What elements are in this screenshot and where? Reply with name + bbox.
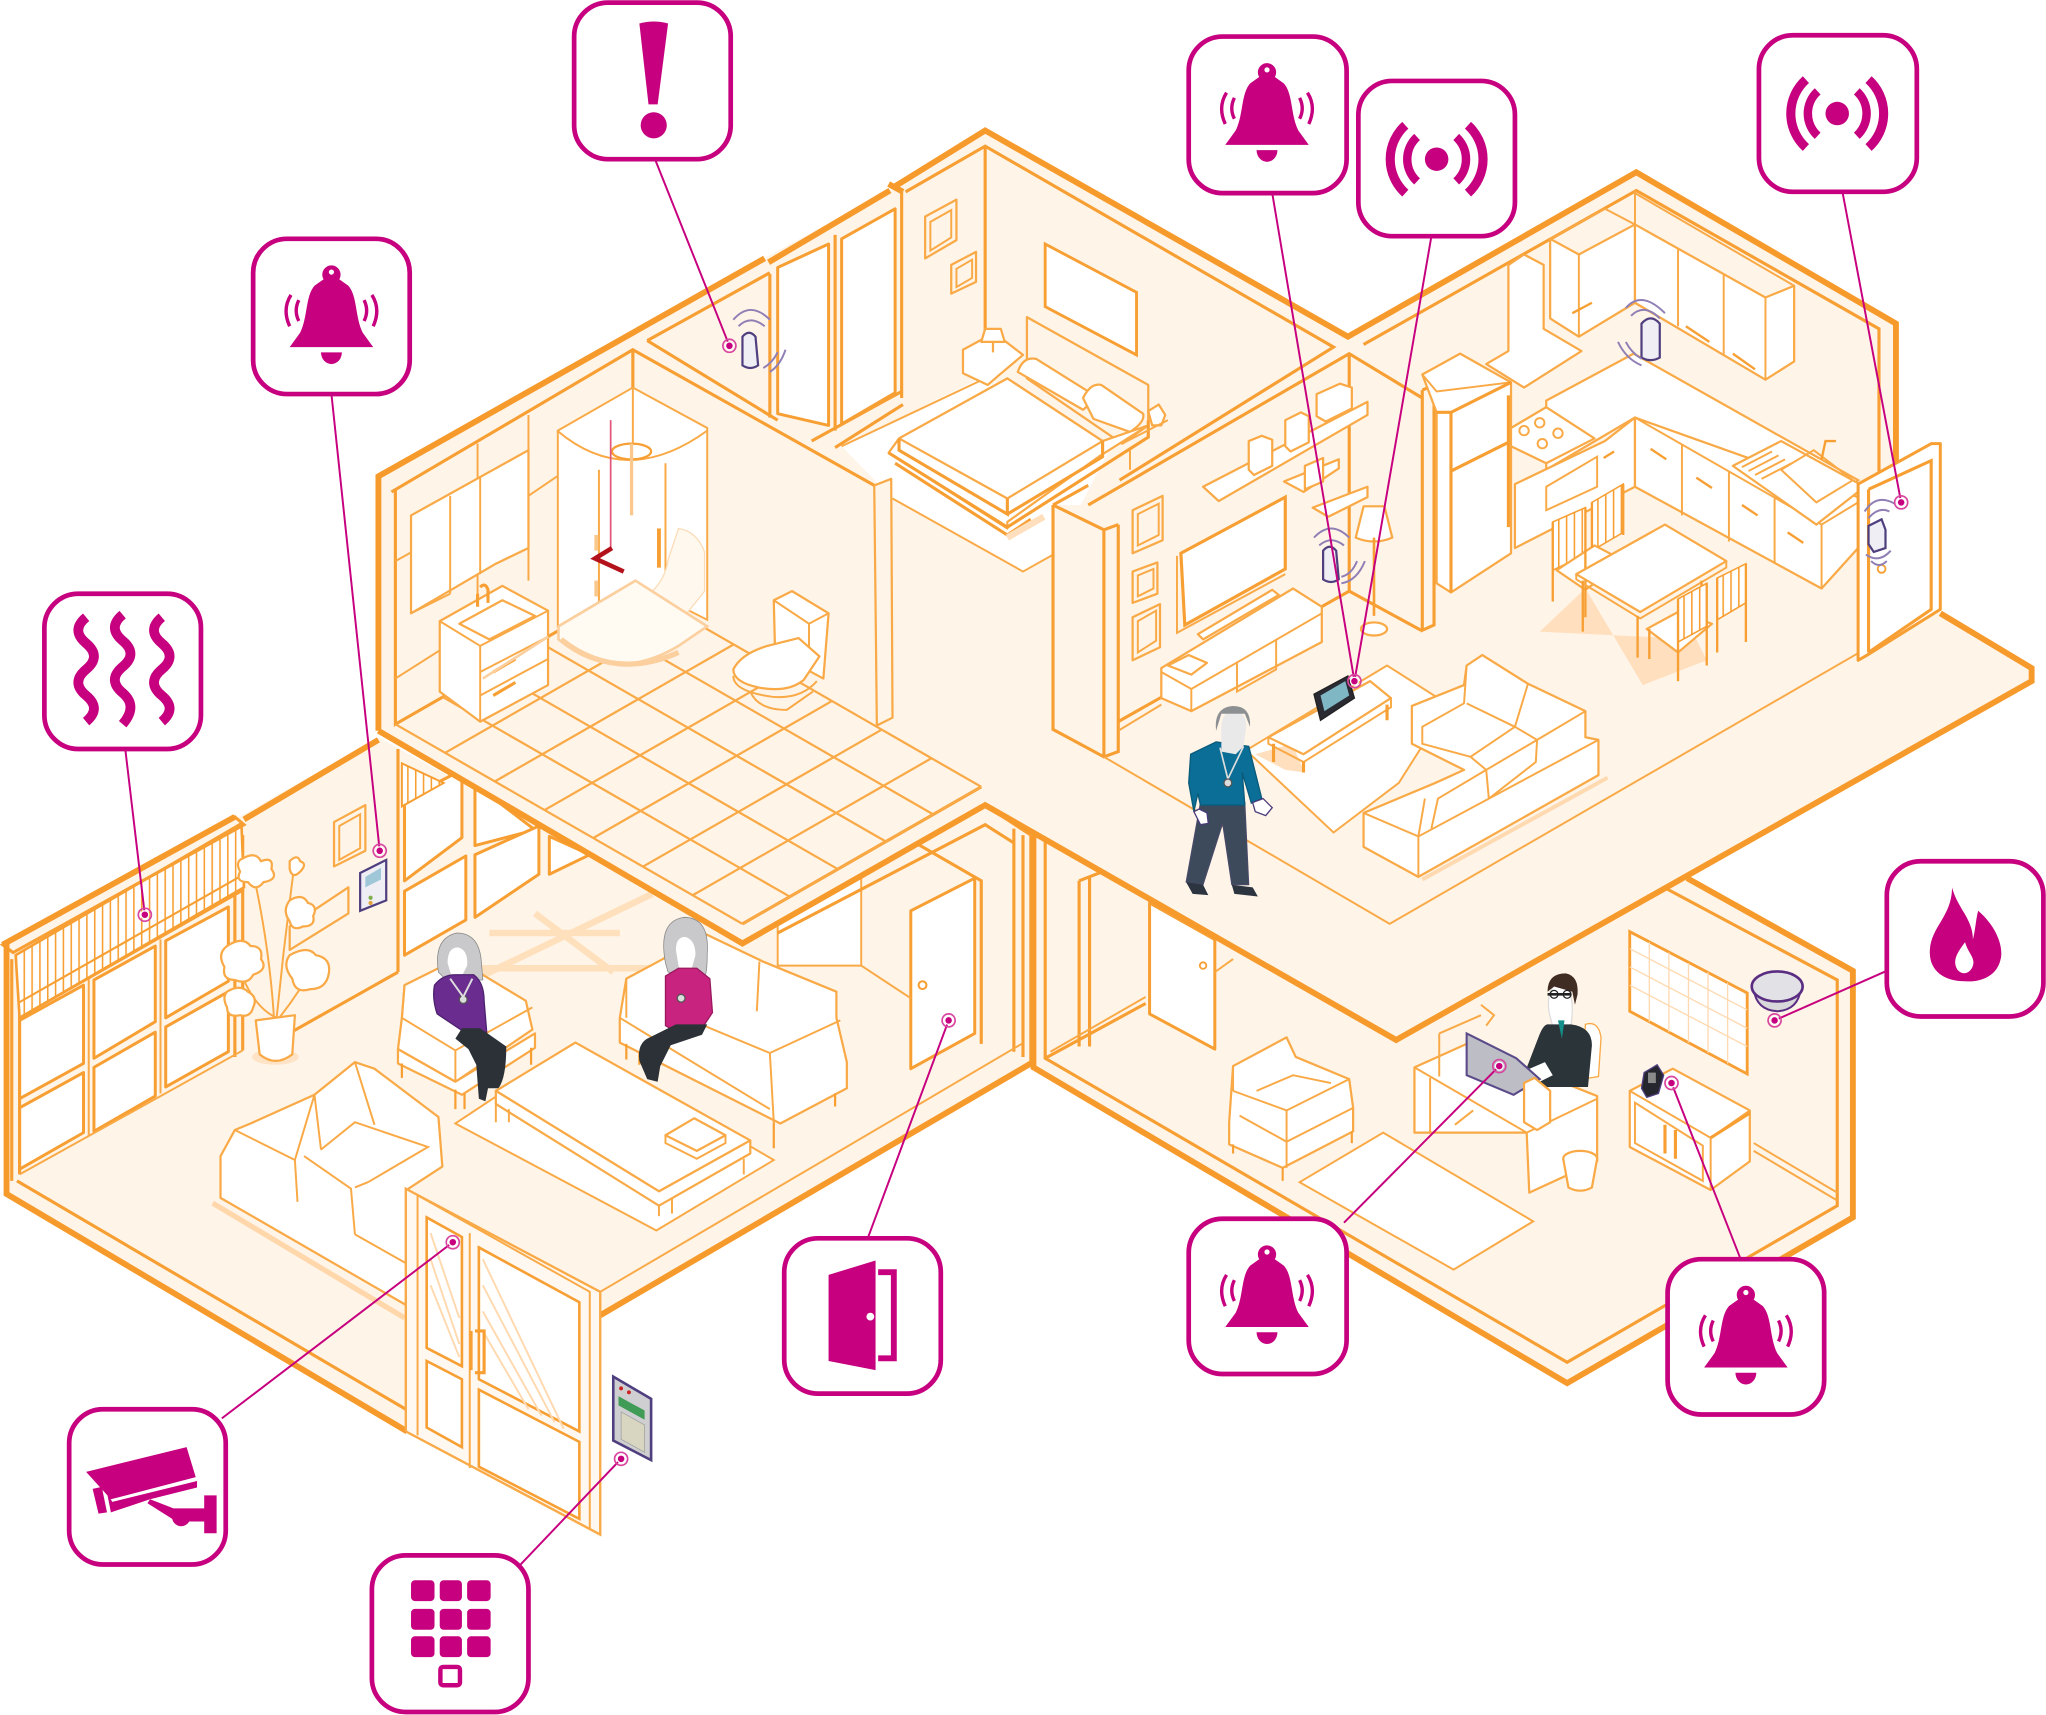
coffee table [1255,681,1391,772]
seated woman in purple [434,933,506,1101]
door sensor [1865,500,1895,565]
front door [406,1189,600,1535]
bathroom walls [391,350,893,726]
desk phone [1641,1065,1664,1097]
wall frames [925,200,1137,355]
living room rug [1246,665,1448,833]
upper outline [378,131,2032,1040]
floor lamp [1356,506,1392,635]
armchair [1229,1037,1353,1181]
bedroom white floor [842,376,1109,572]
icon: keypad [372,1555,528,1712]
vanity unit [440,585,548,722]
kitchen door [1858,444,1940,660]
back wall window [294,749,590,1031]
toilet [733,591,829,710]
left sofa [213,1062,442,1318]
icon: fire [1887,861,2043,1016]
icon: panic alert exclamation [574,3,731,159]
left wall windows [12,835,243,1181]
icon: security camera [69,1409,226,1565]
icon: bell, hub [1189,37,1347,193]
kitchen walls and wall units [1364,191,1879,515]
bedroom walls [647,146,1334,480]
panel: ground floor study [1033,835,1853,1383]
leader lines [125,159,1908,1566]
icon: bell, phone [1668,1259,1824,1414]
living wall sensor [1314,528,1365,583]
panel: ground floor living room [3,737,1031,1537]
living partition wall [1053,354,1859,924]
skirting lines [1754,1143,1837,1200]
shelves and books [1203,384,1367,517]
seated woman in pink [639,917,712,1082]
standing man with pendant [1186,706,1272,896]
dining table shadow [1540,589,1707,685]
icon: bell, living room thermostat [253,239,410,394]
coffee table [496,1043,750,1216]
rug [455,1044,774,1230]
smoke detector [1752,971,1803,1011]
sensor markers [138,339,1908,1465]
TV cabinet [1161,589,1322,711]
man at desk [1525,973,1601,1087]
frames and TV [1133,496,1285,660]
rug [1300,1133,1533,1270]
bed [889,317,1168,538]
stove and base cabinets [1511,407,1865,589]
ground floor thermostat device [360,860,386,911]
icon: wireless signal, door [1759,35,1917,192]
plant [221,855,329,1065]
wall picture frames [290,805,365,950]
wall planner [1630,932,1747,1074]
laptop [1467,1033,1540,1095]
icon: door contact [784,1238,941,1394]
extractor hood [1486,254,1581,388]
icon: heat sensor [44,594,201,749]
bathroom wall sensor [733,310,786,372]
L-shaped sofa [1364,655,1608,879]
fridge [1422,354,1511,592]
dining table and chairs [1553,484,1746,681]
entry keypad [613,1377,651,1460]
home hub tablet [1314,676,1354,720]
kitchen wall sensor [1618,300,1665,365]
three seat sofa [620,933,847,1148]
cabinet [1630,1069,1750,1190]
room thick outline [3,740,1031,1431]
icon: bell, laptop [1189,1219,1347,1374]
floor tiles [395,587,981,924]
study door [1045,872,1233,1058]
sunlight on floor [450,894,652,979]
shower cubicle [557,388,707,664]
paper holder on desk [1524,1078,1550,1130]
desk [1414,1005,1597,1193]
window curtain [3,817,244,1018]
armchair [398,959,535,1109]
icon: wireless signal, hub [1358,81,1515,236]
panel: upper floor [378,131,2032,1040]
hall and interior door [741,805,1031,1069]
